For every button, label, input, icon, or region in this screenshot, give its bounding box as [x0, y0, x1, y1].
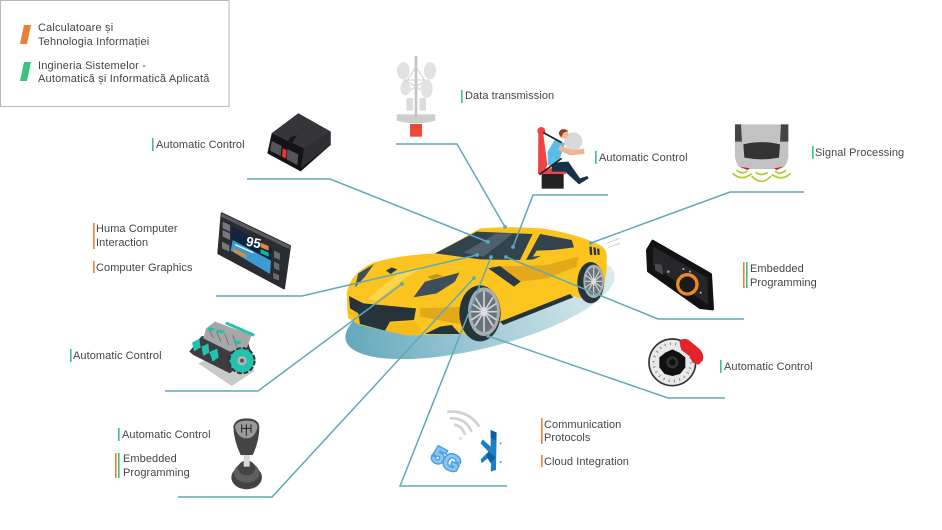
windshield [435, 232, 533, 260]
icon: brake disc [649, 339, 703, 386]
legend [0, 0, 229, 106]
rear wheel [577, 262, 604, 303]
icon: wifi, 5G and bluetooth [428, 412, 502, 478]
side vent [488, 266, 521, 287]
label: automatic control top: Automatic Control [156, 139, 245, 151]
label: automatic control brake: Automatic Control [724, 361, 813, 373]
car shadow [336, 233, 624, 381]
label: communication protocols: Communication [544, 419, 621, 431]
icon: car rear with sensors [733, 124, 791, 181]
icon: wifi, 5G and bluetooth: 5G [428, 442, 465, 478]
label: data transmission: Data transmission [465, 90, 554, 102]
icon: control unit box [267, 113, 331, 171]
label: computer graphics: Computer Graphics [96, 262, 193, 274]
label: embedded programming right: Embedded [750, 263, 804, 275]
legend swatch: orange [20, 25, 31, 44]
icon: gear shift [231, 418, 262, 489]
icon: dashboard display [218, 213, 290, 288]
label: human computer interaction [93, 223, 178, 249]
speed lines [607, 238, 620, 247]
label: embedded programming left: Programming [123, 467, 190, 479]
label: signal processing: Signal Processing [815, 147, 904, 159]
legend text: systems: Automatică și Informatică Aplicată [38, 73, 210, 85]
car body [347, 227, 607, 335]
legend swatch: green [20, 62, 31, 81]
body shading [420, 307, 464, 324]
legend text: computers: Calculatoare și [38, 22, 113, 34]
headlights [413, 273, 459, 297]
icon: airbag passenger [537, 127, 589, 189]
label: embedded programming left [115, 453, 190, 479]
label: communication protocols: Protocols [544, 432, 591, 444]
label: automatic control airbag: Automatic Control [599, 152, 688, 164]
legend text: systems: Ingineria Sistemelor - [38, 60, 146, 72]
label: embedded programming right: Programming [750, 277, 817, 289]
side window [526, 234, 574, 260]
icon: dashboard display: 95 [245, 234, 263, 251]
connector lines [165, 144, 804, 497]
label: communication protocols [541, 418, 621, 444]
grille [349, 296, 416, 331]
icon: radio tower [397, 56, 436, 137]
label: embedded programming right [743, 262, 817, 289]
icon: control panel [647, 241, 713, 309]
hood highlight [367, 265, 427, 301]
label: cloud integration: Cloud Integration [544, 456, 629, 468]
car [336, 227, 624, 381]
front wheel [459, 285, 501, 341]
label: automatic control engine: Automatic Control [73, 350, 162, 362]
label: human computer interaction: Huma Computer [96, 223, 178, 235]
icon: engine [189, 322, 255, 386]
lower sill [500, 294, 573, 325]
rear vents [589, 247, 600, 255]
label: automatic control gear: Automatic Control [122, 429, 211, 441]
legend text: computers: Tehnologia Informației [38, 36, 149, 48]
label: human computer interaction: Interaction [96, 237, 148, 249]
label: embedded programming left: Embedded [123, 453, 177, 465]
